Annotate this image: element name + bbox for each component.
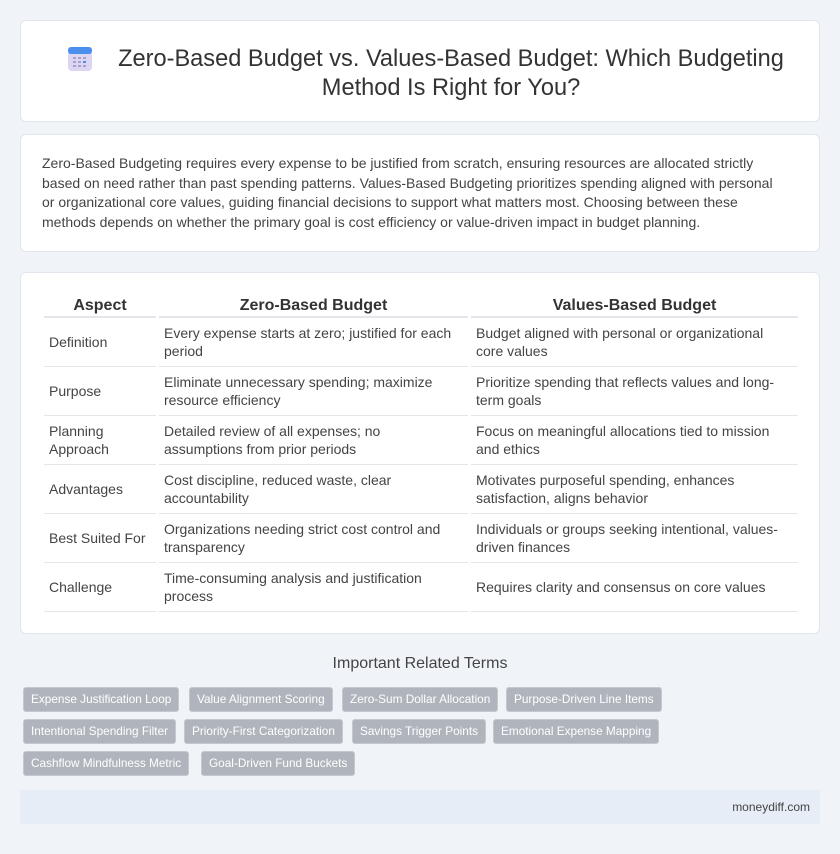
related terms tags: Intentional Spending Filter	[31, 724, 168, 738]
comparison table: Budget aligned with personal or organizational core values	[476, 325, 763, 359]
comparison table: Prioritize spending that reflects values and long-term goals	[476, 374, 774, 408]
comparison table: Every expense starts at zero; justified for each period	[164, 325, 451, 359]
related terms tags: Cashflow Mindfulness Metric	[31, 756, 181, 770]
comparison table: Challenge	[49, 579, 112, 595]
comparison table: Values-Based Budget	[553, 296, 716, 314]
comparison table	[44, 296, 798, 612]
related terms tags: Goal-Driven Fund Buckets	[209, 756, 347, 770]
comparison table: Advantages	[49, 481, 123, 497]
related terms tags: Purpose-Driven Line Items	[514, 692, 654, 706]
comparison table: Eliminate unnecessary spending; maximize resource efficiency	[164, 374, 432, 408]
footer	[20, 790, 820, 824]
comparison table: Focus on meaningful allocations tied to mission and ethics	[476, 423, 769, 457]
comparison table: Zero-Based Budget	[240, 296, 387, 314]
comparison table: Organizations needing strict cost control and transparency	[164, 521, 440, 555]
related terms tags: Savings Trigger Points	[360, 724, 478, 738]
comparison table: Motivates purposeful spending, enhances satisfaction, aligns behavior	[476, 472, 734, 506]
comparison table: Definition	[49, 334, 107, 350]
related terms tags: Priority-First Categorization	[192, 724, 335, 738]
description card	[20, 134, 820, 252]
related terms tags: Emotional Expense Mapping	[501, 724, 651, 738]
comparison table: Individuals or groups seeking intentional, values-driven finances	[476, 521, 778, 555]
title: Zero-Based Budget vs. Values-Based Budget: Which Budgeting Method Is Right for You?	[118, 46, 784, 101]
comparison table: Aspect	[73, 296, 127, 314]
comparison table: Purpose	[49, 383, 101, 399]
comparison table: Planning Approach	[49, 423, 109, 457]
comparison table: Cost discipline, reduced waste, clear accountability	[164, 472, 391, 506]
comparison table: Requires clarity and consensus on core values	[476, 579, 766, 595]
comparison table: Time-consuming analysis and justification process	[164, 570, 422, 604]
description text: Zero-Based Budgeting requires every expense to be justified from scratch, ensuring resources are allocated strictly based on need rather than past spending patterns. Values-Based Budgeting prioritizes spending aligned with personal or organizational core values, guiding financial decisions to support what matters most. Choosing between these methods depends on whether the primary goal is cost efficiency or value-driven impact in budget planning.	[42, 155, 773, 230]
comparison table card	[20, 272, 820, 634]
related terms tags: Zero-Sum Dollar Allocation	[350, 692, 490, 706]
related terms heading: Important Related Terms	[333, 655, 507, 672]
header card	[20, 20, 820, 122]
footer: moneydiff.com	[732, 800, 810, 814]
related terms tags: Value Alignment Scoring	[197, 692, 325, 706]
related terms tags: Expense Justification Loop	[31, 692, 171, 706]
comparison table: Detailed review of all expenses; no assumptions from prior periods	[164, 423, 380, 457]
comparison table: Best Suited For	[49, 530, 146, 546]
icon: calendar	[68, 47, 92, 71]
